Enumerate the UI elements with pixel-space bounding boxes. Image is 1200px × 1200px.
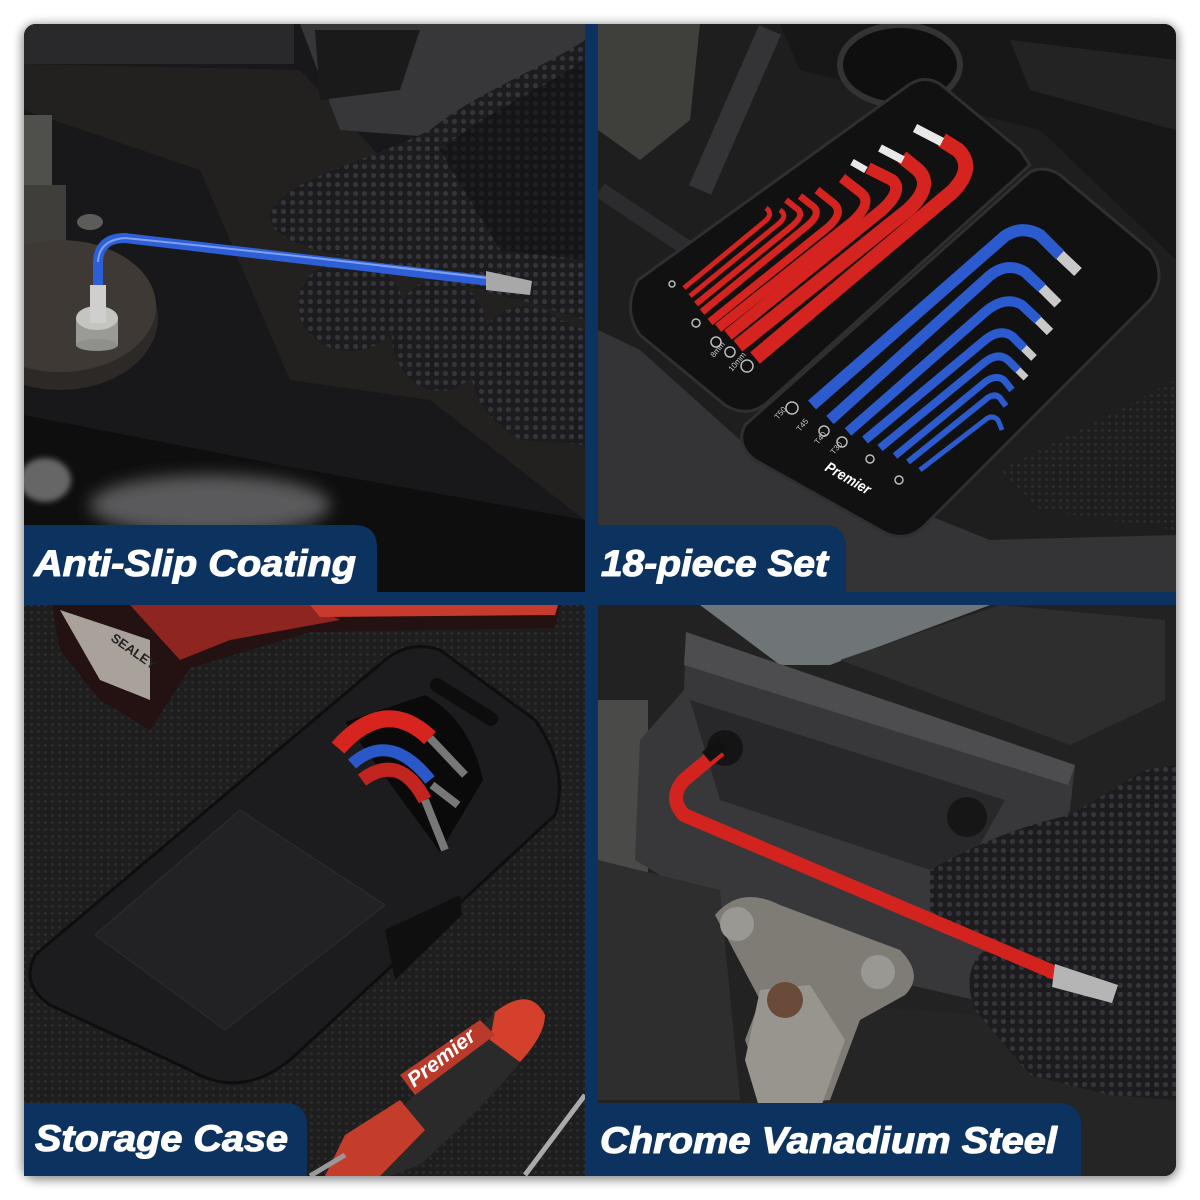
case size markings: 10mm [727,350,748,373]
case size markings: 8mm [709,340,727,359]
open case left half [630,80,1030,411]
case size markings: T30 [829,440,845,456]
label: Anti-Slip Coating [24,525,377,592]
panel: 18-piece set photo [598,24,1176,592]
open case right half [742,169,1159,536]
label: Chrome Vanadium Steel [586,1103,1081,1176]
work glove: SEALEY [108,630,160,672]
case size markings: T45 [795,417,811,433]
vice body [635,632,1075,1000]
label: Storage Case [24,1103,307,1176]
blue hex key [90,238,532,323]
label: Anti-Slip Coating: Anti-Slip Coating [33,543,356,584]
black gloved hand [270,40,585,445]
case size markings [669,281,903,484]
panel: anti-slip coating photo [0,24,585,592]
steel clamp [715,897,914,1105]
red hex key [676,744,1118,1003]
label: Storage Case: Storage Case [35,1118,288,1159]
divider: vertical [585,24,598,1176]
panel: storage case photo [24,605,585,1176]
screwdriver: Premier [403,1023,482,1092]
panel: chrome vanadium steel photo [598,605,1176,1176]
screwdriver [310,999,585,1176]
nut and bolt [24,115,158,390]
label: 18-piece Set [598,525,846,592]
work glove [52,605,560,730]
red hex keys [684,140,966,358]
label: 18-piece Set: 18-piece Set [601,543,830,584]
black gloved hand [930,765,1176,1100]
logo on case: Premier [822,459,875,499]
blue hex keys [812,230,1060,470]
closed case [30,647,560,1083]
case size markings: T50 [773,405,789,421]
label: Chrome Vanadium Steel: Chrome Vanadium Steel [600,1120,1058,1161]
case size markings: T40 [813,430,829,446]
divider: horizontal [24,592,1176,605]
